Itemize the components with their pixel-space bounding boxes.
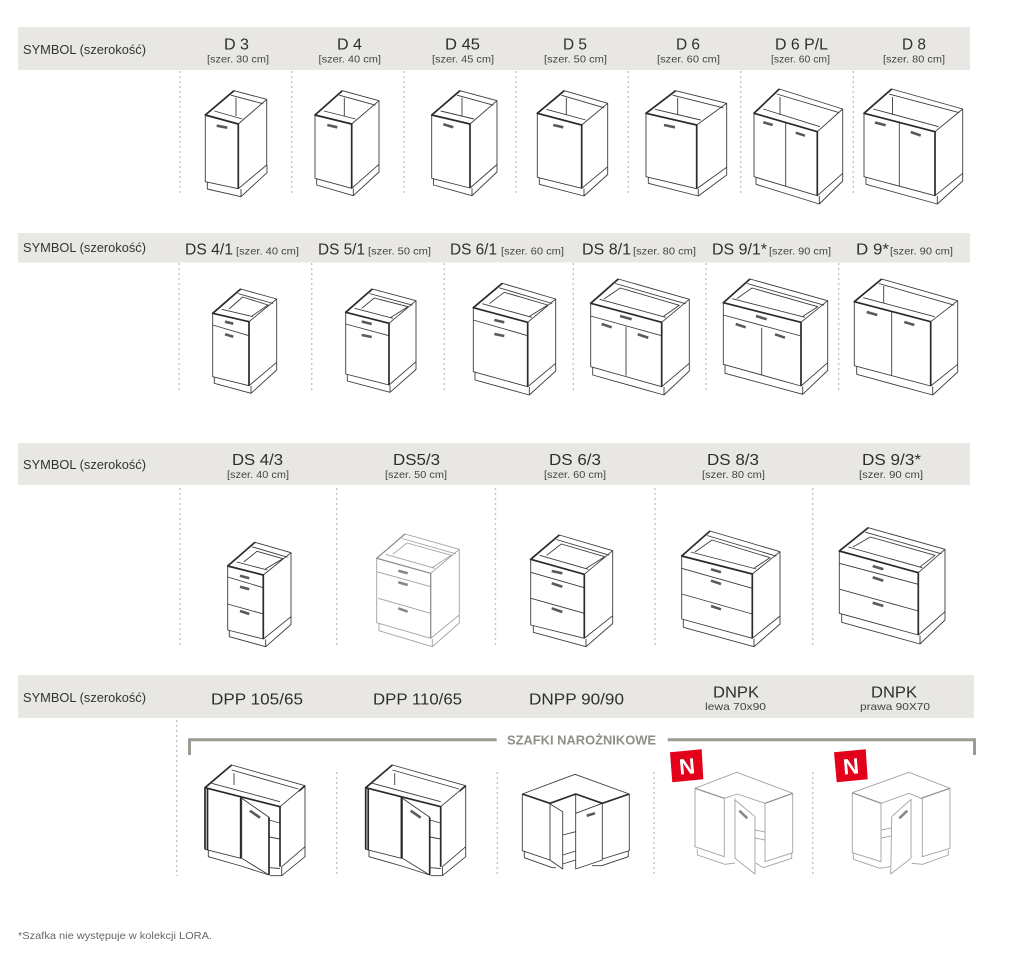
cabinet icon: D 6 P/L xyxy=(754,89,843,204)
bracket: corner cabinets: SZAFKI NAROŻNIKOWE xyxy=(507,732,656,748)
header band row 1 xyxy=(18,27,970,70)
cabinet icon: DNPP 90/90 xyxy=(522,774,629,869)
heading: DNPK lewa: DNPK xyxy=(713,684,760,702)
heading: DNPK prawa xyxy=(860,684,930,713)
cabinet icon: DS 8/1 xyxy=(591,279,689,395)
heading: DS 4/1: [szer. 40 cm] xyxy=(236,246,299,258)
heading: DS 6/1: DS 6/1 xyxy=(450,242,497,258)
heading: DNPK prawa: DNPK xyxy=(871,684,918,702)
heading: DS 5/1: DS 5/1 xyxy=(318,242,365,258)
cabinet icon: DS 4/1 xyxy=(213,289,277,393)
heading: DS 9/3*: DS 9/3* xyxy=(862,452,921,469)
heading: DS 8/1: [szer. 80 cm] xyxy=(633,246,696,258)
footnote: *Szafka nie występuje w kolekcji LORA. xyxy=(18,930,212,942)
heading: DS 4/3: [szer. 40 cm] xyxy=(227,469,289,481)
heading: DS 9/1* xyxy=(712,242,831,258)
heading: DS 4/3: DS 4/3 xyxy=(232,452,283,469)
cabinet icon: D 45 xyxy=(432,91,497,196)
cabinet icon: D 8 xyxy=(864,89,963,204)
cabinet icon: DS 6/3 xyxy=(531,535,613,647)
panel: row 2 drawer and door cabinets xyxy=(18,233,970,395)
cabinet icon: DS 6/1 xyxy=(473,283,556,395)
cabinet icon: D 5 xyxy=(537,91,608,196)
heading: DS 4/1: DS 4/1 xyxy=(185,242,233,258)
row label: SYMBOL (szerokość) xyxy=(23,691,146,705)
panel: row 1 base cabinets xyxy=(18,27,970,204)
panel: row 4 corner cabinets xyxy=(18,675,974,876)
row label: SYMBOL (szerokość) xyxy=(23,43,146,57)
heading: D 9*: D 9* xyxy=(856,242,889,258)
new badge: N xyxy=(834,749,868,782)
heading: DS 9/3*: [szer. 90 cm] xyxy=(859,469,923,481)
bracket: corner cabinets xyxy=(190,732,974,755)
cabinet icon: DS5/3 (light) xyxy=(377,534,459,647)
new badge: N: N xyxy=(678,753,696,780)
heading: D 9*: [szer. 90 cm] xyxy=(890,246,953,258)
panel: row 3 three-drawer cabinets xyxy=(18,443,970,647)
cabinet icon: DS 8/3 xyxy=(682,531,780,647)
heading: D 6: D 6 xyxy=(676,36,700,54)
heading: DS5/3 xyxy=(385,452,447,481)
heading: D 45: [szer. 45 cm] xyxy=(432,54,494,66)
heading: DS 4/3 xyxy=(227,452,289,481)
cabinet icon: D 4 xyxy=(315,91,379,196)
heading: DS 4/1 xyxy=(185,242,299,258)
new badge: N xyxy=(670,749,703,782)
heading: D 6 P/L xyxy=(771,36,830,66)
heading: DS5/3: [szer. 50 cm] xyxy=(385,469,447,481)
new badge: N: N xyxy=(842,753,860,780)
heading: D 6 P/L: [szer. 60 cm] xyxy=(771,54,830,66)
heading: DS 8/3: [szer. 80 cm] xyxy=(702,469,765,481)
cabinet icon: DS 5/1 xyxy=(346,289,416,392)
cabinet icon: DS 4/3 xyxy=(228,542,291,647)
heading: DS 6/1: [szer. 60 cm] xyxy=(501,246,564,258)
heading: D 45 xyxy=(432,36,494,66)
header band row 2 xyxy=(18,233,970,262)
heading: D 8 xyxy=(883,36,945,66)
cabinet icon: DPP 110/65 xyxy=(366,765,466,876)
heading: DPP 110/65: DPP 110/65 xyxy=(373,692,462,708)
heading: D 3: D 3 xyxy=(224,36,249,54)
cabinet icon: DNPK lewa 70x90 (light) xyxy=(695,772,793,874)
heading: DNPK prawa: prawa 90X70 xyxy=(860,701,930,713)
heading: DNPK lewa xyxy=(705,684,766,713)
heading: D 8: [szer. 80 cm] xyxy=(883,54,945,66)
heading: D 3: [szer. 30 cm] xyxy=(207,54,269,66)
heading: D 8: D 8 xyxy=(902,36,926,54)
heading: DS 5/1: [szer. 50 cm] xyxy=(368,246,431,258)
cabinet icon: D 6 xyxy=(646,91,727,196)
heading: DS 8/1 xyxy=(582,242,696,258)
heading: D 4: [szer. 40 cm] xyxy=(318,54,381,66)
heading: D 6: [szer. 60 cm] xyxy=(657,54,720,66)
heading: D 4: D 4 xyxy=(337,36,362,54)
heading: DNPK lewa: lewa 70x90 xyxy=(705,701,766,713)
heading: DS 8/3: DS 8/3 xyxy=(707,452,759,469)
cabinet icon: D 3 xyxy=(205,91,267,197)
heading: DS 6/3: DS 6/3 xyxy=(549,452,601,469)
heading: D 5: D 5 xyxy=(563,36,587,54)
heading: D 6 xyxy=(657,36,720,66)
heading: DS 6/3: [szer. 60 cm] xyxy=(544,469,606,481)
cabinet icon: DS 9/3* xyxy=(839,528,945,644)
heading: DS 6/1 xyxy=(450,242,564,258)
heading: DS 9/1*: [szer. 90 cm] xyxy=(769,246,831,258)
heading: D 3 xyxy=(207,36,269,66)
heading: DS 9/1*: DS 9/1* xyxy=(712,242,767,258)
cabinet icon: DPP 105/65 xyxy=(205,765,305,876)
heading: DPP 105/65: DPP 105/65 xyxy=(211,692,303,708)
heading: DS 5/1 xyxy=(318,242,431,258)
heading: D 6 P/L: D 6 P/L xyxy=(775,36,828,54)
row label: SYMBOL (szerokość) xyxy=(23,241,146,255)
heading: DS 9/3* xyxy=(859,452,923,481)
header band row 3 xyxy=(18,443,970,485)
heading: D 5 xyxy=(544,36,607,66)
heading: D 45: D 45 xyxy=(445,36,480,54)
heading: DS 8/3 xyxy=(702,452,765,481)
cabinet icon: DS 9/1* xyxy=(723,279,828,394)
heading: DS 6/3 xyxy=(544,452,606,481)
heading: DS 8/1: DS 8/1 xyxy=(582,242,631,258)
cabinet icon: DNPK prawa 90X70 (light) xyxy=(852,772,950,874)
heading: D 9* xyxy=(856,242,953,258)
header band row 4 xyxy=(18,675,974,718)
heading: DNPP 90/90: DNPP 90/90 xyxy=(529,692,624,708)
heading: DS5/3: DS5/3 xyxy=(393,452,440,469)
row label: SYMBOL (szerokość) xyxy=(23,458,146,472)
cabinet icon: D 9* xyxy=(854,279,958,395)
heading: D 4 xyxy=(318,36,381,66)
heading: D 5: [szer. 50 cm] xyxy=(544,54,607,66)
